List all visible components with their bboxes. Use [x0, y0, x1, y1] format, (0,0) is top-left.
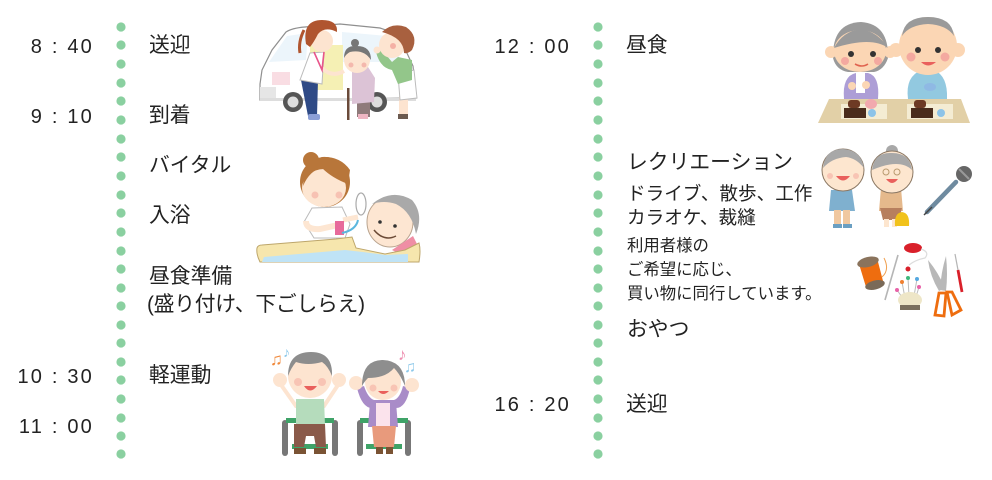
man	[889, 17, 965, 99]
man	[367, 195, 419, 258]
icon: microphone	[924, 166, 972, 215]
carer right	[374, 25, 417, 119]
music notes: ♫	[270, 350, 283, 369]
label: light exercise: 軽運動	[149, 364, 211, 387]
time: 10:30: 10 : 30	[17, 366, 94, 388]
woman	[871, 145, 913, 227]
illustration: wheelchair exercise	[270, 344, 419, 456]
label: shopping note	[627, 237, 822, 303]
label: activities	[627, 183, 812, 228]
illustration: van with carers	[260, 20, 417, 120]
left timeline dots	[116, 22, 126, 459]
music notes: ♪	[283, 344, 290, 360]
woman in wheelchair	[349, 360, 419, 456]
label: lunch prep: 昼食準備	[149, 265, 232, 288]
label: pick-up: 送迎	[149, 34, 191, 57]
illustration: carer bathing elderly man	[257, 152, 420, 262]
music notes: ♫	[404, 359, 416, 376]
label: lunch prep	[147, 265, 365, 316]
time: 12:00: 12 : 00	[494, 36, 571, 58]
carer	[300, 152, 366, 238]
label: vitals: バイタル	[149, 154, 231, 177]
time: 16:20: 16 : 20	[494, 394, 571, 416]
label: lunch: 昼食	[626, 34, 668, 57]
elderly woman	[344, 39, 375, 120]
table with meals	[818, 99, 970, 123]
right timeline dots	[593, 22, 603, 459]
music notes	[270, 344, 416, 376]
label: activities: ドライブ、散歩、工作	[627, 183, 812, 204]
seam ripper	[955, 254, 962, 292]
man in wheelchair	[273, 352, 346, 456]
time: 9:10: 9 : 10	[31, 106, 94, 128]
label: shopping note: ご希望に応じ、	[627, 261, 742, 279]
illustration: sewing tools	[856, 243, 962, 316]
woman	[825, 22, 896, 99]
bathtub	[257, 237, 420, 262]
thread spool	[856, 254, 887, 292]
label: drop-off: 送迎	[626, 393, 668, 416]
scissors	[928, 256, 961, 316]
label: bath: 入浴	[149, 204, 191, 227]
tape	[904, 243, 927, 272]
van	[260, 24, 416, 112]
label: snack: おやつ	[627, 318, 689, 341]
carer left	[300, 20, 344, 120]
pin cushion	[895, 276, 922, 310]
time: 11:00: 11 : 00	[19, 416, 94, 438]
illustration: cheerful couple	[822, 145, 913, 228]
label: arrival: 到着	[149, 104, 191, 127]
man	[822, 149, 864, 228]
label: shopping note: 買い物に同行しています。	[627, 285, 822, 303]
label: activities: カラオケ、裁縫	[627, 207, 756, 228]
label: recreation: レクリエーション	[627, 151, 793, 174]
illustration: couple eating lunch	[818, 17, 970, 123]
label: shopping note: 利用者様の	[627, 237, 709, 255]
music notes: ♪	[398, 345, 406, 364]
time: 8:40: 8 : 40	[31, 36, 94, 58]
label: lunch prep: (盛り付け、下ごしらえ)	[147, 293, 365, 316]
needle	[885, 255, 898, 300]
